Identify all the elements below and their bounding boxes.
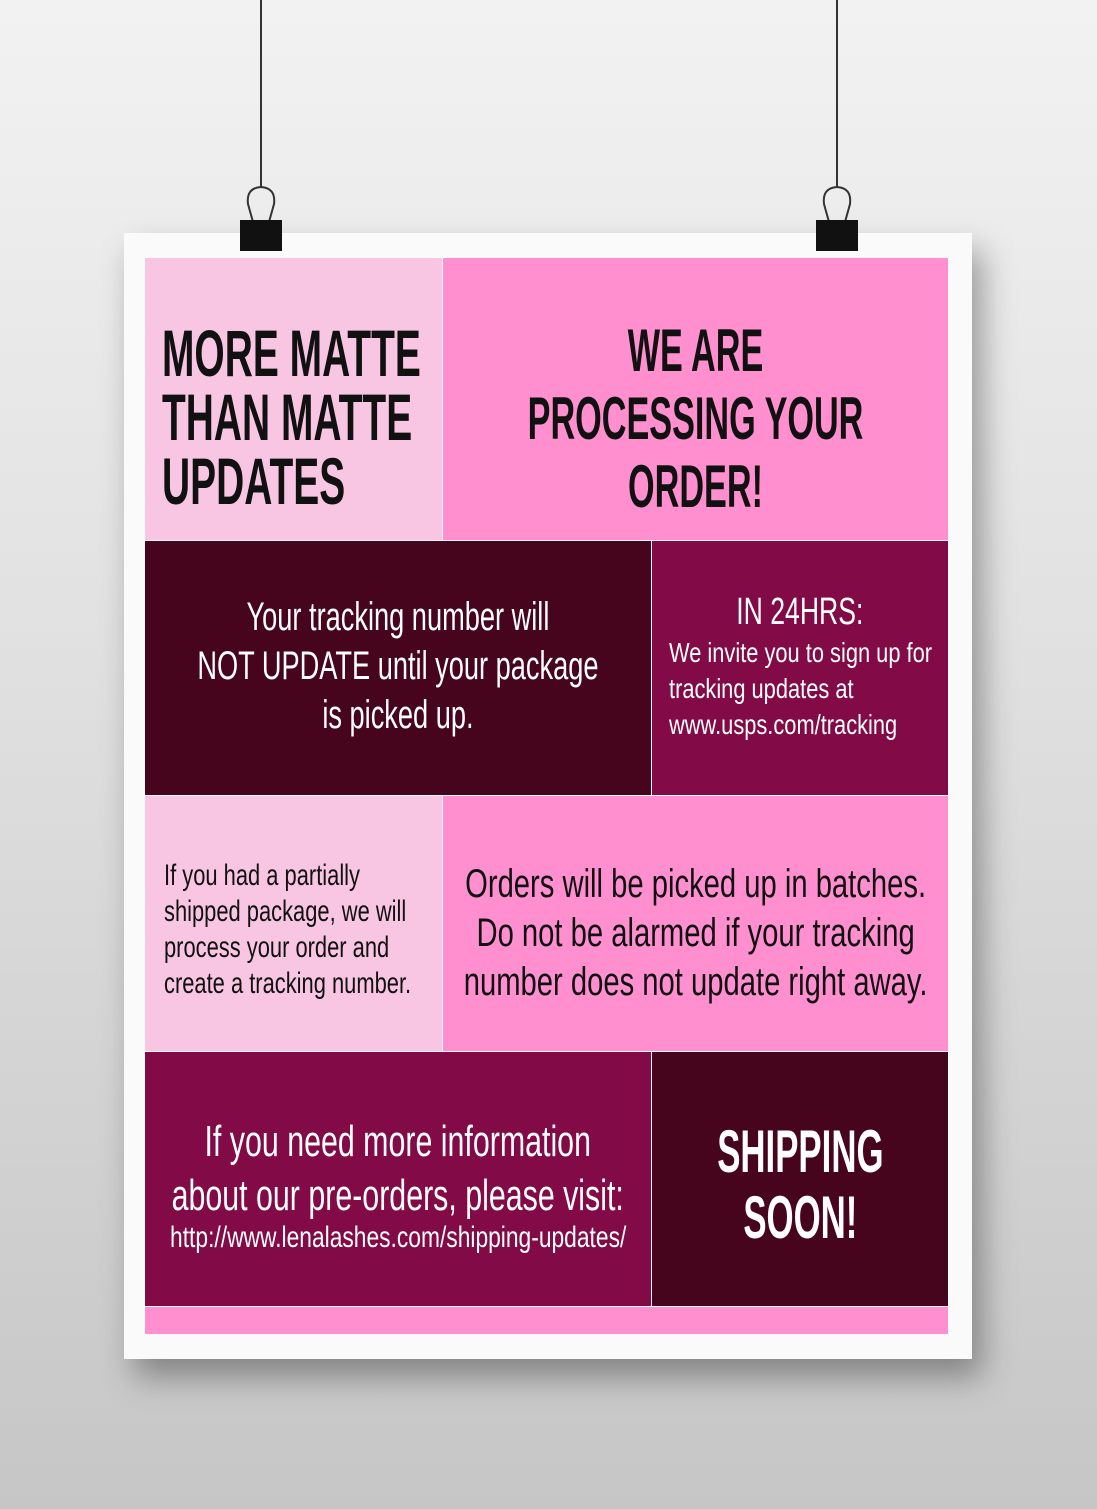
panel: processing: ORDER! xyxy=(628,453,763,520)
panel: more info xyxy=(145,1052,651,1306)
icon: clip left xyxy=(240,186,282,251)
panel: partial shipment: process your order and xyxy=(164,930,389,964)
panel: batches: number does not update right away. xyxy=(464,960,927,1004)
panel: title xyxy=(145,258,442,540)
poster xyxy=(124,233,972,1359)
panel: partial shipment: create a tracking number. xyxy=(164,966,411,1000)
panel: processing: PROCESSING YOUR xyxy=(528,385,863,452)
panel: more info: about our pre-orders, please visit: xyxy=(172,1171,624,1220)
panel: partial shipment xyxy=(145,796,442,1051)
panel: tracking note: is picked up. xyxy=(322,692,474,736)
panel: batches: Do not be alarmed if your tracking xyxy=(476,911,915,955)
panel: partial shipment: If you had a partially xyxy=(164,858,360,892)
panel: processing xyxy=(443,258,948,540)
panel: title: MORE MATTE xyxy=(162,316,421,390)
panel: 24hrs xyxy=(652,541,948,795)
panel: title: UPDATES xyxy=(162,444,345,518)
bottom strip xyxy=(145,1307,948,1334)
panel: shipping soon: SOON! xyxy=(743,1184,857,1251)
icon: clip right xyxy=(816,186,858,251)
panel: tracking note: NOT UPDATE until your package xyxy=(197,644,599,688)
panel: batches xyxy=(443,796,948,1051)
panel: more info: If you need more information xyxy=(205,1117,591,1166)
string: left xyxy=(260,0,262,188)
panel: tracking note xyxy=(145,541,651,795)
panel: shipping soon xyxy=(652,1052,948,1306)
string: right xyxy=(836,0,838,188)
panel: title: THAN MATTE xyxy=(162,380,412,454)
panel: batches: Orders will be picked up in batches. xyxy=(465,862,926,906)
panel: shipping soon: SHIPPING xyxy=(717,1118,883,1185)
panel: partial shipment: shipped package, we will xyxy=(164,894,406,928)
panel: tracking note: Your tracking number will xyxy=(247,594,549,638)
panel: 24hrs: We invite you to sign up for xyxy=(669,637,932,668)
panel: 24hrs: IN 24HRS: xyxy=(736,591,864,633)
panel: processing: WE ARE xyxy=(628,317,763,384)
panel: more info: http://www.lenalashes.com/shipping-updates/ xyxy=(170,1221,626,1254)
panel: 24hrs: www.usps.com/tracking xyxy=(669,709,897,740)
panel: 24hrs: tracking updates at xyxy=(669,673,854,704)
